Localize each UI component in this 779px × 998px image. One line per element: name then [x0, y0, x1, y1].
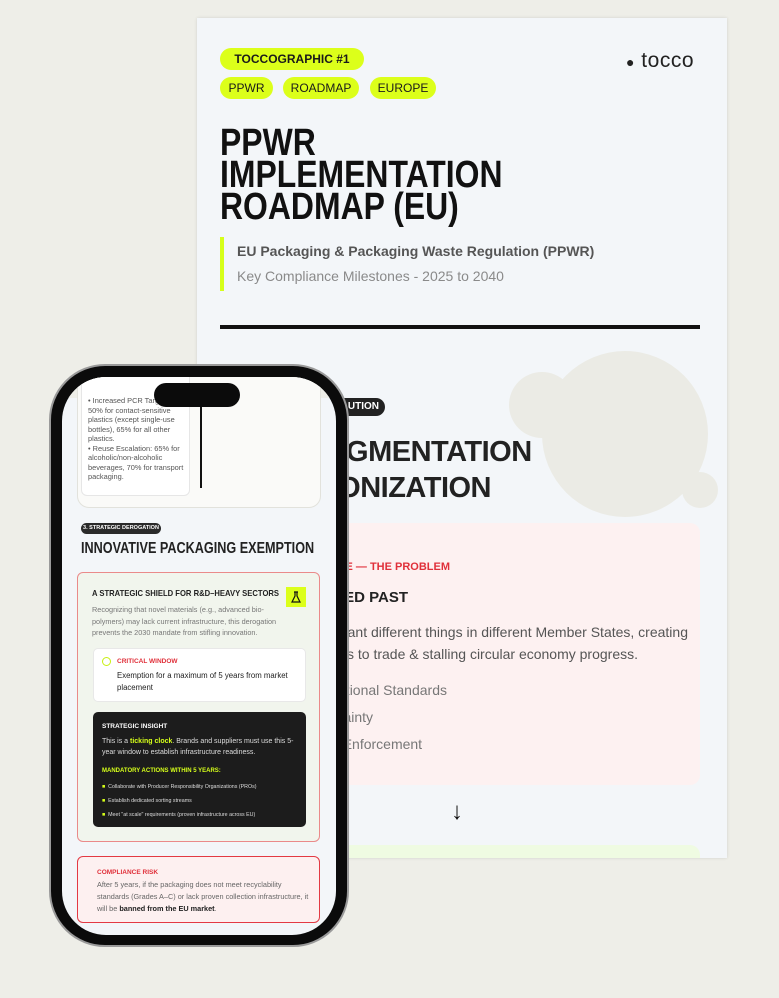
- pill: toccographic: [220, 48, 364, 70]
- icon: flask: [286, 587, 306, 607]
- panel: the problem: • Legal Uncertainty: [255, 709, 373, 725]
- title: ROADMAP (EU): [220, 186, 459, 228]
- pill: toccographic: TOCCOGRAPHIC #1: [234, 52, 350, 66]
- text card: targets: • Increased PCR Targets: 50% for contact-sensitive plastics (except single-use bottles), 65% for all other plastics.: [88, 396, 175, 443]
- panel: the problem: barriers to trade & stalling circular economy progress.: [307, 646, 638, 662]
- panel: compliance risk: [77, 856, 320, 923]
- card: critical window: [93, 648, 306, 702]
- card: strategic insight: MANDATORY ACTIONS WITHIN 5 YEARS:: [102, 768, 221, 774]
- card: critical window: CRITICAL WINDOW: [117, 658, 178, 665]
- dynamic island: [154, 383, 240, 407]
- heading: fragmentation to harmonization: [197, 436, 532, 504]
- panel: the problem: Rules meant different things in different Member States, creating: [289, 624, 688, 640]
- tags: EUROPE: [378, 81, 428, 95]
- heading: innovative packaging exemption: INNOVATIVE PACKAGING EXEMPTION: [81, 540, 314, 557]
- subtitle: EU Packaging & Packaging Waste Regulation (PPWR): [237, 243, 594, 259]
- title: IMPLEMENTATION: [220, 154, 503, 196]
- panel: compliance risk: After 5 years, if the packaging does not meet recyclability standards (Grades A–C) or lack proven collection infrastructure, it will be banned from the EU market.: [97, 880, 308, 913]
- panel: the problem: A FRAGMENTED PAST: [245, 589, 408, 606]
- panel: solution (green): [297, 845, 700, 885]
- panel: infographic page: [197, 18, 727, 858]
- panel: the problem: [297, 523, 700, 785]
- card: strategic insight: ■ Collaborate with Producer Responsibility Organizations (PROs): [102, 784, 257, 790]
- pill: section solution: [285, 398, 385, 416]
- pill: section solution: 1. THE SOLUTION: [293, 401, 379, 412]
- title: PPWR: [220, 122, 316, 164]
- phone: [49, 364, 349, 947]
- subtitle: Key Compliance Milestones - 2025 to 2040: [237, 268, 504, 284]
- panel: strategic shield: [77, 572, 320, 842]
- panel: strategic shield: Recognizing that novel materials (e.g., advanced bio-polymers) may lack current infrastructure, this derogation prevents the 2030 mandate from stifling innovation.: [92, 605, 276, 637]
- subtitle: [220, 237, 640, 291]
- logo: tocco: ● tocco: [626, 49, 694, 72]
- tags: [220, 77, 436, 99]
- card: strategic insight: ■ Establish dedicated sorting streams: [102, 798, 192, 804]
- tags: ROADMAP: [291, 81, 351, 95]
- panel: compliance risk: COMPLIANCE RISK: [97, 869, 158, 876]
- panel: the problem: • Inconsistent Enforcement: [255, 736, 422, 752]
- pill: strategic derogation: [81, 523, 161, 534]
- arrow: down: ↓: [451, 798, 463, 825]
- text card: targets: • Reuse Escalation: 65% for alcoholic/non-alcoholic beverages, 70% for transport packaging.: [88, 444, 183, 481]
- card: critical window: Exemption for a maximum of 5 years from market placement: [117, 671, 288, 692]
- heading: fragmentation to harmonization: TO HARMONIZATION: [207, 472, 491, 504]
- title: [220, 122, 503, 228]
- tags: PPWR: [228, 81, 264, 95]
- phone screen: [62, 377, 336, 935]
- text card: targets: [81, 368, 190, 496]
- card: previous section: [77, 367, 321, 508]
- decorative circles: [509, 351, 718, 517]
- card: strategic insight: STRATEGIC INSIGHT: [102, 723, 167, 730]
- card: strategic insight: ■ Meet "at scale" requirements (proven infrastructure across EU): [102, 812, 255, 818]
- pill: strategic derogation: 3. STRATEGIC DEROGATION: [83, 525, 159, 531]
- heading: fragmentation to harmonization: FROM FRAGMENTATION: [197, 436, 532, 468]
- card: strategic insight: [93, 712, 306, 827]
- panel: the problem: • Divergent National Standards: [255, 682, 447, 698]
- panel: strategic shield: A STRATEGIC SHIELD FOR R&D–HEAVY SECTORS: [92, 588, 279, 598]
- card: strategic insight: This is a ticking clock. Brands and suppliers must use this 5-year window to establish infrastructure readiness.: [102, 738, 293, 756]
